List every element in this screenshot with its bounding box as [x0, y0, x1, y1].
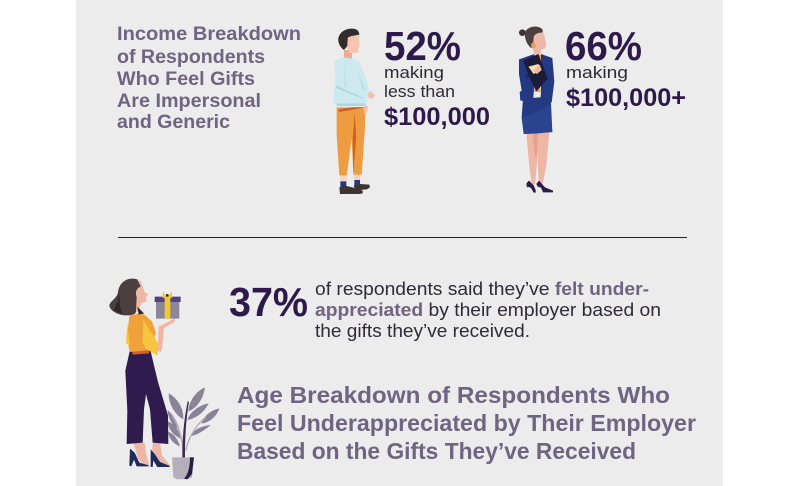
heading: income breakdown: Are Impersonal	[117, 90, 261, 112]
heading: age breakdown: Feel Underappreciated by Their Employer	[237, 410, 696, 436]
stat: 66% making $100,000+: $100,000+	[566, 84, 686, 112]
text block: under-appreciated statement	[315, 279, 661, 341]
stat: 66% making $100,000+: 66%	[565, 23, 642, 69]
icon: man in light blue sweater	[333, 29, 375, 194]
stat: 52% making less than $100,000: $100,000	[384, 103, 490, 131]
heading: income breakdown: Who Feel Gifts	[117, 68, 255, 90]
text block: under-appreciated statement: appreciated by their employer based on	[315, 300, 661, 320]
stat: 52% making less than $100,000: less than	[384, 82, 455, 101]
heading: income breakdown: of Respondents	[117, 46, 265, 68]
stat: 52% making less than $100,000: making	[384, 63, 444, 82]
heading: age breakdown	[237, 382, 696, 464]
heading: age breakdown: Based on the Gifts They’ve Received	[237, 438, 636, 464]
stat: 66% making $100,000+: making	[566, 63, 628, 82]
icon: woman holding gift with potted plant	[109, 279, 219, 479]
stat: 52% making less than $100,000	[384, 23, 490, 131]
heading: income breakdown: and Generic	[117, 111, 230, 133]
stat: 52% making less than $100,000: 52%	[384, 23, 461, 69]
heading: income breakdown: Income Breakdown	[117, 23, 301, 45]
text block: under-appreciated statement: of respondents said they’ve felt under-	[315, 279, 649, 299]
icon: woman in navy suit	[519, 27, 554, 193]
stat: 37%: 37%	[229, 279, 308, 325]
stat: 66% making $100,000+	[565, 23, 686, 112]
icon: potted plant	[168, 387, 219, 479]
heading: income breakdown	[117, 23, 301, 133]
heading: age breakdown: Age Breakdown of Respondents Who	[237, 382, 670, 408]
text block: under-appreciated statement: the gifts they’ve received.	[315, 321, 530, 341]
